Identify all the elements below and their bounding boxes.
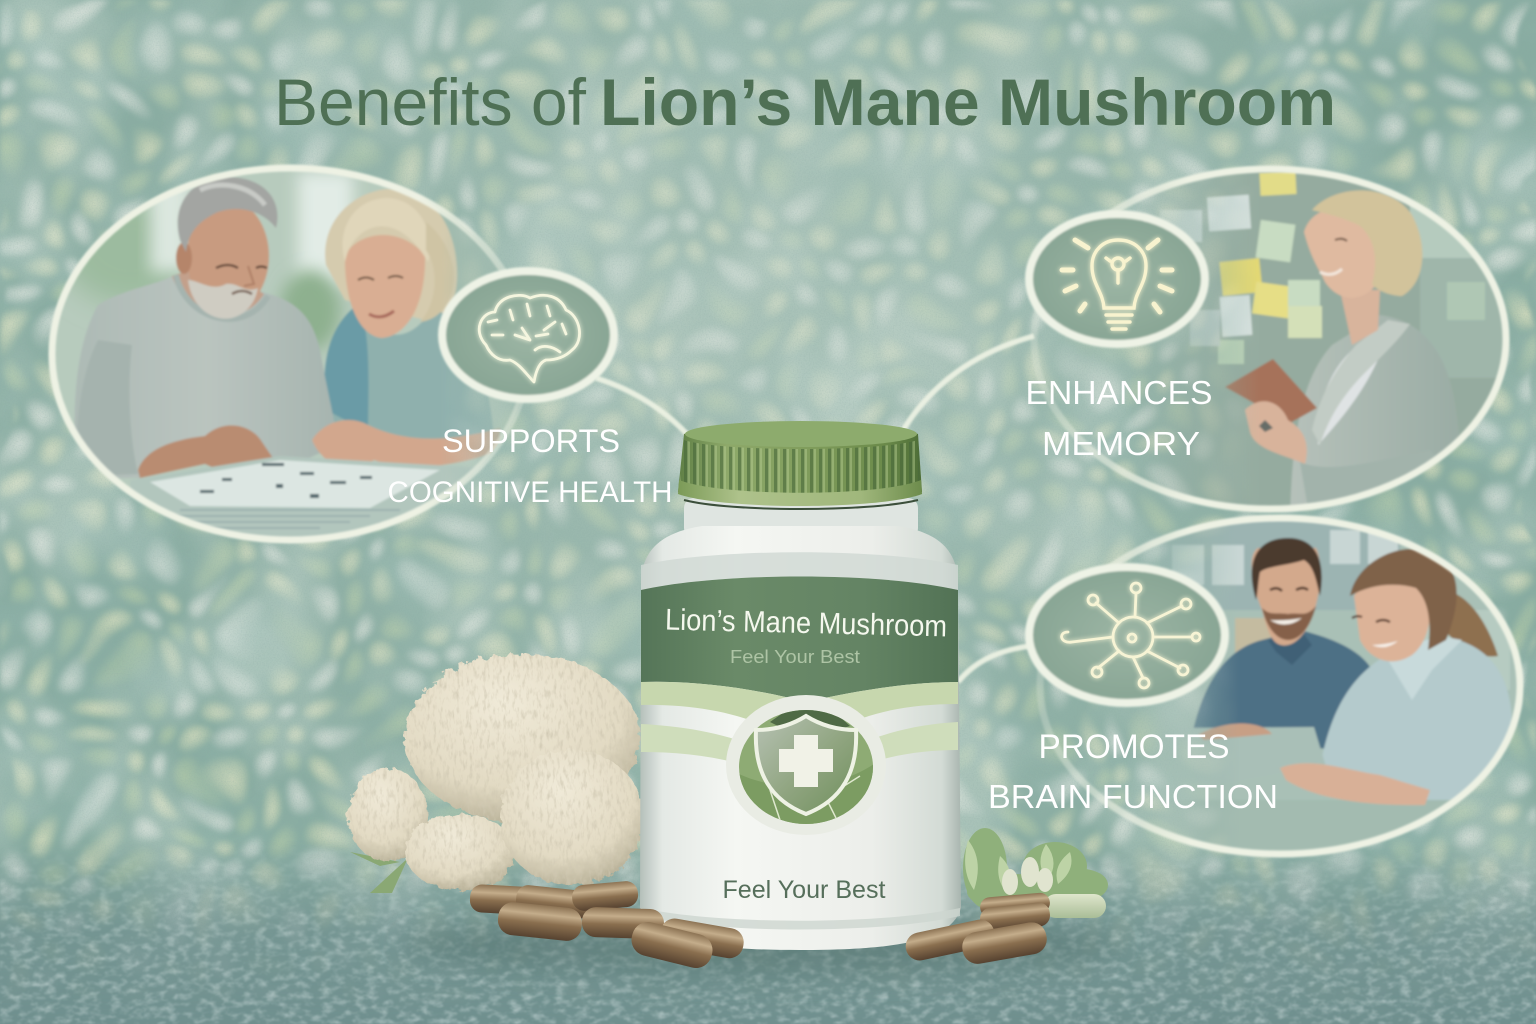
man shirt (1190, 630, 1380, 750)
capsules (469, 880, 1051, 971)
panel: enhances memory (1026, 165, 1520, 520)
supplement bottle (640, 421, 961, 950)
photo: couple with tablet (1172, 522, 1516, 851)
title: Benefits of (274, 65, 587, 139)
icon: shield with cross (726, 695, 886, 835)
bubble outline (1040, 518, 1520, 854)
connector: cognitive bubble to bottle (596, 378, 694, 442)
connector: brain function bubble to bottle (958, 646, 1030, 682)
bubble outline (1034, 169, 1506, 509)
woman head (1354, 576, 1430, 661)
label: enhances memory (1026, 374, 1212, 462)
bottle base band (641, 908, 960, 930)
panel: supports cognitive health (50, 165, 672, 545)
photo: woman at sticky-note board (1158, 172, 1502, 506)
icon: light bulb (1029, 214, 1205, 344)
bubble outline (52, 168, 528, 540)
bottle label band (641, 576, 958, 702)
bottle tagline top: Feel Your Best (730, 647, 860, 667)
floor (0, 840, 1536, 1024)
icon: neural network (1029, 567, 1225, 703)
sticky notes (1219, 171, 1297, 318)
head (1340, 290, 1380, 345)
label: promotes brain function: PROMOTES (1038, 728, 1230, 766)
shoulder band (641, 552, 958, 590)
title (274, 65, 1336, 139)
label: promotes brain function (988, 728, 1278, 815)
woman (325, 189, 457, 320)
woman cardigan (1290, 315, 1440, 506)
bottle neck (684, 498, 918, 538)
label: promotes brain function: BRAIN FUNCTION (988, 778, 1278, 815)
label: enhances memory: ENHANCES (1026, 374, 1212, 411)
bottle name: Lion’s Mane Mushroom (665, 604, 947, 643)
man (75, 276, 338, 478)
table (1390, 800, 1450, 814)
man's arm and hand (138, 425, 281, 478)
woman shirt (1318, 640, 1512, 812)
tablet (1191, 726, 1325, 765)
light green waves (641, 682, 958, 728)
title: Lion’s Mane Mushroom (600, 65, 1336, 139)
label: supports cognitive health: SUPPORTS (442, 423, 620, 459)
bottle body (640, 526, 961, 950)
woman ponytail (1446, 594, 1499, 658)
puzzle (212, 456, 436, 471)
connector: memory bubble to bottle (902, 336, 1034, 432)
label: enhances memory: MEMORY (1042, 425, 1200, 462)
woman's arm and hand (312, 420, 500, 468)
icon: brain (442, 271, 614, 399)
lion's mane mushrooms (348, 654, 644, 893)
hand (1245, 401, 1307, 464)
panel: promotes brain function (988, 515, 1530, 860)
floor shadow (400, 915, 1120, 975)
herb leaves behind bottle (963, 828, 1108, 918)
label: supports cognitive health: COGNITIVE HEALTH (388, 476, 672, 509)
photo: couple doing a puzzle (54, 170, 512, 537)
book (1225, 359, 1317, 423)
label: supports cognitive health (388, 423, 672, 509)
man head (1252, 548, 1320, 646)
hands (1198, 724, 1272, 740)
bottle cap (678, 421, 922, 509)
bottle tagline bottom: Feel Your Best (722, 876, 886, 904)
